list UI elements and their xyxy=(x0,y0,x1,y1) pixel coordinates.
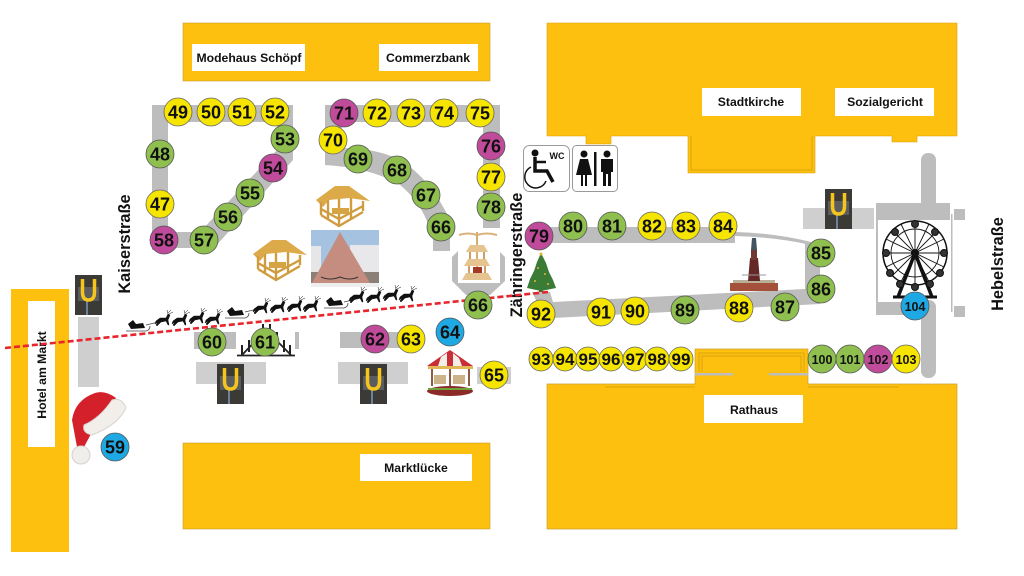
icon: women and men toilets xyxy=(572,146,618,192)
stall 68: 68 xyxy=(387,160,407,180)
stall 54 xyxy=(259,154,287,182)
stall 90 xyxy=(621,297,649,325)
stall 55 xyxy=(236,179,264,207)
image: Christmas pyramid xyxy=(458,232,500,283)
stall 89: 89 xyxy=(675,300,695,320)
stall 71 xyxy=(330,99,358,127)
stall 84: 84 xyxy=(713,216,733,236)
stall 58: 58 xyxy=(154,230,174,250)
stall 94 xyxy=(553,347,577,371)
stall 103: 103 xyxy=(896,353,916,367)
stall 95 xyxy=(576,347,600,371)
stall 52: 52 xyxy=(265,102,285,122)
icon: accessible WC: WC xyxy=(550,151,565,161)
stall 102 xyxy=(864,345,892,373)
stall 77: 77 xyxy=(481,168,501,188)
stall 66 upper: 66 xyxy=(431,218,451,238)
stall 89 xyxy=(671,296,699,324)
stall 77 xyxy=(477,163,505,191)
stall 81 xyxy=(598,212,626,240)
stall 61: 61 xyxy=(255,332,275,352)
stall 91: 91 xyxy=(591,302,611,322)
stall 56: 56 xyxy=(218,208,238,228)
stall 63: 63 xyxy=(401,330,421,350)
stall 57: 57 xyxy=(194,230,214,250)
stall 94: 94 xyxy=(556,350,575,369)
stall 66 upper xyxy=(427,213,455,241)
Stadtkirche portal detail xyxy=(691,136,812,170)
stall 68 xyxy=(383,156,411,184)
stall 48: 48 xyxy=(150,144,170,164)
stall 88: 88 xyxy=(729,298,749,318)
label: Sozialgericht xyxy=(835,88,934,116)
stall 72 xyxy=(363,99,391,127)
stall 65: 65 xyxy=(484,366,504,386)
stall 58 xyxy=(150,226,178,254)
stall 79: 79 xyxy=(529,226,549,246)
stall 49 xyxy=(164,98,192,126)
stall 67 xyxy=(412,181,440,209)
stall 78 xyxy=(477,193,505,221)
stall 75: 75 xyxy=(470,104,490,124)
label: Modehaus Schöpf xyxy=(192,44,305,71)
icon: U-Bahn entrance south right xyxy=(360,364,387,404)
street name: Hebelstraße: Hebelstraße xyxy=(989,217,1007,311)
stall 52 xyxy=(261,98,289,126)
stall 60 xyxy=(198,328,226,356)
stall 75 xyxy=(466,99,494,127)
stall 60: 60 xyxy=(202,332,222,352)
stall 93 xyxy=(529,347,553,371)
stall 51: 51 xyxy=(232,102,252,122)
stall 69: 69 xyxy=(348,150,368,170)
icon: monument fountain xyxy=(730,238,778,291)
stall 62 xyxy=(361,325,389,353)
stall 82 xyxy=(638,212,666,240)
icon: Ferris wheel xyxy=(878,220,951,298)
stall 83: 83 xyxy=(676,216,696,236)
stall 83 xyxy=(672,212,700,240)
stall 63 xyxy=(397,325,425,353)
building: Stadtkirche and Sozialgericht block xyxy=(547,23,957,173)
stall 100: 100 xyxy=(812,353,832,367)
stall 62: 62 xyxy=(365,330,385,350)
stall 66 lower xyxy=(464,291,492,319)
building: Hotel am Markt block xyxy=(11,289,69,552)
stall 57 xyxy=(190,226,218,254)
stall 79 xyxy=(525,222,553,250)
stall 67: 67 xyxy=(416,186,436,206)
stall 51 xyxy=(228,98,256,126)
stall 73: 73 xyxy=(401,104,421,124)
stall 76 xyxy=(477,132,505,160)
stall 71: 71 xyxy=(334,104,354,124)
stall 47: 47 xyxy=(150,194,170,214)
stall 47 xyxy=(146,190,174,218)
label: Marktlücke: Marktlücke xyxy=(384,461,448,475)
stall 56 xyxy=(214,203,242,231)
label: Commerzbank xyxy=(379,44,478,71)
stall 66 lower: 66 xyxy=(468,296,488,316)
stall 53 xyxy=(271,125,299,153)
stall 65 xyxy=(480,361,508,389)
stall 61 xyxy=(251,328,279,356)
stall 54: 54 xyxy=(263,158,283,178)
building: Marktlücke block xyxy=(183,443,490,529)
stall 55: 55 xyxy=(240,184,260,204)
stall 72: 72 xyxy=(367,104,387,124)
Rathaus portal detail xyxy=(605,353,899,387)
label: Rathaus xyxy=(704,395,803,423)
stall 98 xyxy=(645,347,669,371)
stall 49: 49 xyxy=(168,102,188,122)
street name: Kaiserstraße: Kaiserstraße xyxy=(116,194,134,294)
icon: candle arch xyxy=(237,324,295,356)
stall 64 xyxy=(436,318,464,346)
stall 99: 99 xyxy=(672,350,690,369)
label: Modehaus Schöpf: Modehaus Schöpf xyxy=(197,51,302,65)
reindeer sleighs xyxy=(126,285,417,331)
stall 102: 102 xyxy=(868,353,888,367)
stall 86 xyxy=(807,275,835,303)
stall 50 xyxy=(197,98,225,126)
stall 48 xyxy=(146,140,174,168)
stall 70: 70 xyxy=(323,130,343,150)
stall 92: 92 xyxy=(531,304,551,324)
stall 98: 98 xyxy=(648,350,666,369)
stall 96: 96 xyxy=(602,350,620,369)
stall 104 xyxy=(901,292,929,320)
stall 101: 101 xyxy=(840,353,860,367)
light walkways at the U-Bahn entrances xyxy=(78,208,874,387)
label: Stadtkirche xyxy=(702,88,801,116)
stall 92 xyxy=(527,300,555,328)
stall 84 xyxy=(709,212,737,240)
stall 86: 86 xyxy=(811,280,831,300)
icon: gazebo left xyxy=(253,240,307,280)
stall 97: 97 xyxy=(626,350,644,369)
stall 103 xyxy=(892,345,920,373)
icon: U-Bahn entrance south left xyxy=(217,364,244,404)
stall 64: 64 xyxy=(440,322,460,342)
icon: accessible WC xyxy=(524,146,570,192)
stall 85: 85 xyxy=(811,244,831,264)
stall 90: 90 xyxy=(625,302,645,322)
label: Rathaus: Rathaus xyxy=(730,403,778,417)
stall 96 xyxy=(599,347,623,371)
label: Sozialgericht: Sozialgericht xyxy=(847,95,923,109)
icon: U-Bahn entrance east xyxy=(825,189,852,229)
stall 53: 53 xyxy=(275,130,295,150)
icon: Christmas tree xyxy=(527,252,556,292)
stall 78: 78 xyxy=(481,198,501,218)
building: Modehaus Schöpf and Commerzbank block xyxy=(183,23,490,81)
stall 87 xyxy=(771,293,799,321)
stall 70 xyxy=(319,126,347,154)
stall 80: 80 xyxy=(563,216,583,236)
stall 93: 93 xyxy=(532,350,550,369)
stall paths: grey walkways xyxy=(152,105,965,378)
stall 97 xyxy=(623,347,647,371)
stall 50: 50 xyxy=(201,102,221,122)
red dashed line xyxy=(5,292,548,348)
stall 88 xyxy=(725,294,753,322)
icon: U-Bahn entrance west xyxy=(75,275,102,315)
label: Commerzbank: Commerzbank xyxy=(386,51,470,65)
image: stone pyramid on the market square xyxy=(311,230,379,287)
stall 59 xyxy=(101,433,129,461)
stall 99 xyxy=(669,347,693,371)
stall 100 xyxy=(808,345,836,373)
icon: carousel xyxy=(427,350,473,396)
stall 91 xyxy=(587,298,615,326)
label: Hotel am Markt xyxy=(28,301,55,447)
stall 74: 74 xyxy=(434,104,454,124)
label: Marktlücke xyxy=(360,454,472,481)
stall 85 xyxy=(807,239,835,267)
stall 104: 104 xyxy=(905,300,925,314)
stall 74 xyxy=(430,99,458,127)
stall 87: 87 xyxy=(775,298,795,318)
stall 76: 76 xyxy=(481,136,501,156)
stall 59: 59 xyxy=(105,438,125,458)
street name: Zähringerstraße: Zähringerstraße xyxy=(508,193,526,317)
building: Rathaus block xyxy=(547,349,957,529)
stall 73 xyxy=(397,99,425,127)
label: Hotel am Markt: Hotel am Markt xyxy=(35,331,49,419)
stall 95: 95 xyxy=(579,350,597,369)
stall 82: 82 xyxy=(642,216,662,236)
icon: Santa hat xyxy=(72,392,126,464)
icon: gazebo top xyxy=(316,186,370,226)
stall 81: 81 xyxy=(602,216,622,236)
stall 69 xyxy=(344,145,372,173)
stall 80 xyxy=(559,212,587,240)
label: Stadtkirche: Stadtkirche xyxy=(718,95,784,109)
stall 101 xyxy=(836,345,864,373)
